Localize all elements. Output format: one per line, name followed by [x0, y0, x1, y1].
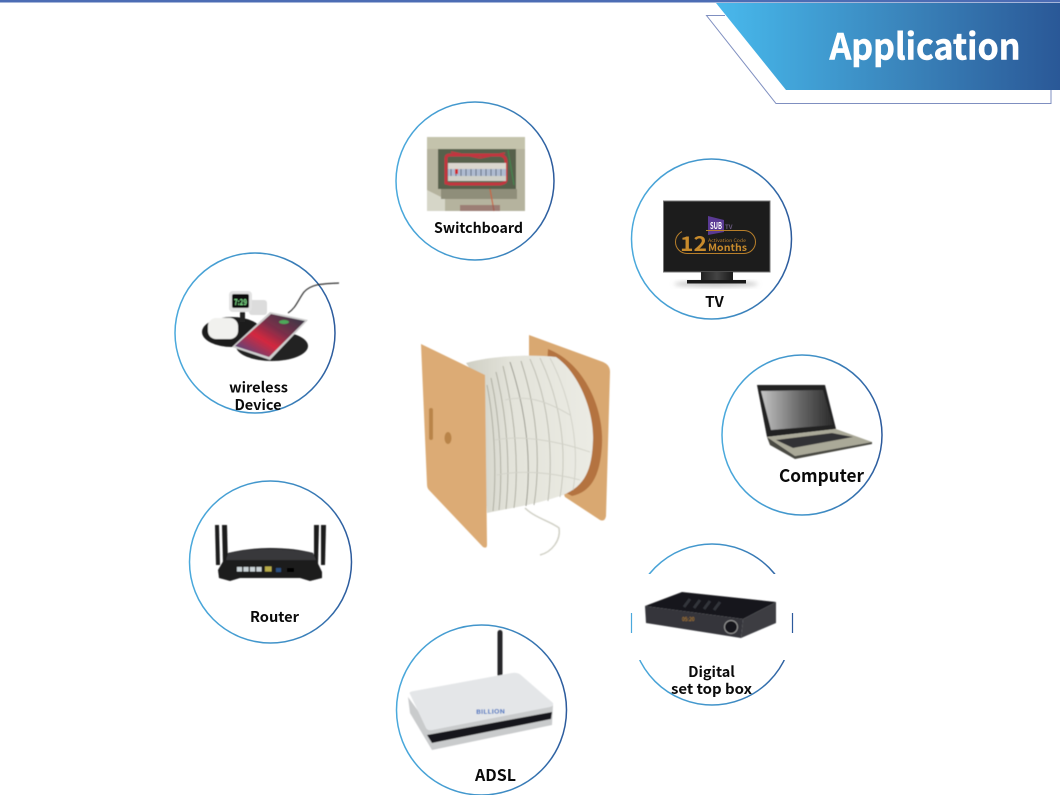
wireless charger illustration	[202, 283, 339, 361]
circle: computer	[722, 355, 882, 515]
circle: switchboard	[396, 102, 554, 260]
TV logo: Months	[708, 239, 747, 254]
circle: ADSL	[396, 625, 566, 795]
circle: wireless device	[175, 253, 339, 415]
banner outline	[706, 16, 1051, 104]
spool left plate	[421, 344, 487, 548]
set top box illustration	[645, 592, 776, 638]
TV logo: 12	[680, 228, 707, 257]
modem logo: BILLION	[476, 706, 505, 716]
switchboard photo	[427, 137, 525, 211]
banner shape	[716, 3, 1060, 90]
label: Computer	[779, 463, 864, 488]
TV logo: Activation Code	[708, 237, 747, 244]
wireless charger illustration: 7:29	[234, 297, 247, 308]
top bar	[0, 0, 1060, 2]
laptop illustration	[757, 385, 872, 459]
header banner	[706, 3, 1060, 104]
central cable spool	[421, 335, 610, 555]
plate hole	[444, 432, 452, 444]
label: ADSL	[474, 762, 516, 786]
ADSL modem illustration	[408, 630, 553, 750]
router illustration	[215, 525, 326, 581]
label: TV	[705, 291, 725, 312]
TV illustration	[664, 201, 770, 286]
spool inner ring	[540, 349, 602, 496]
label: Switchboard	[434, 217, 523, 238]
label: Digital	[688, 661, 735, 682]
circle: router	[190, 481, 352, 643]
spool right plate	[529, 335, 610, 520]
TV logo	[676, 216, 756, 257]
cable tail	[525, 508, 559, 555]
label line 2: Device	[234, 394, 282, 415]
set top box illustration: 05:20	[682, 616, 695, 623]
circle: digital set top box	[625, 544, 800, 705]
plate slot	[429, 408, 433, 440]
cable coil	[466, 356, 593, 513]
title: Application	[829, 18, 1020, 70]
TV logo: TV	[725, 222, 733, 231]
circle: TV	[632, 159, 792, 319]
label: Router	[250, 606, 300, 627]
label line 2: set top box	[671, 678, 752, 699]
label: wireless	[229, 376, 288, 398]
TV logo: SUB	[710, 219, 722, 232]
